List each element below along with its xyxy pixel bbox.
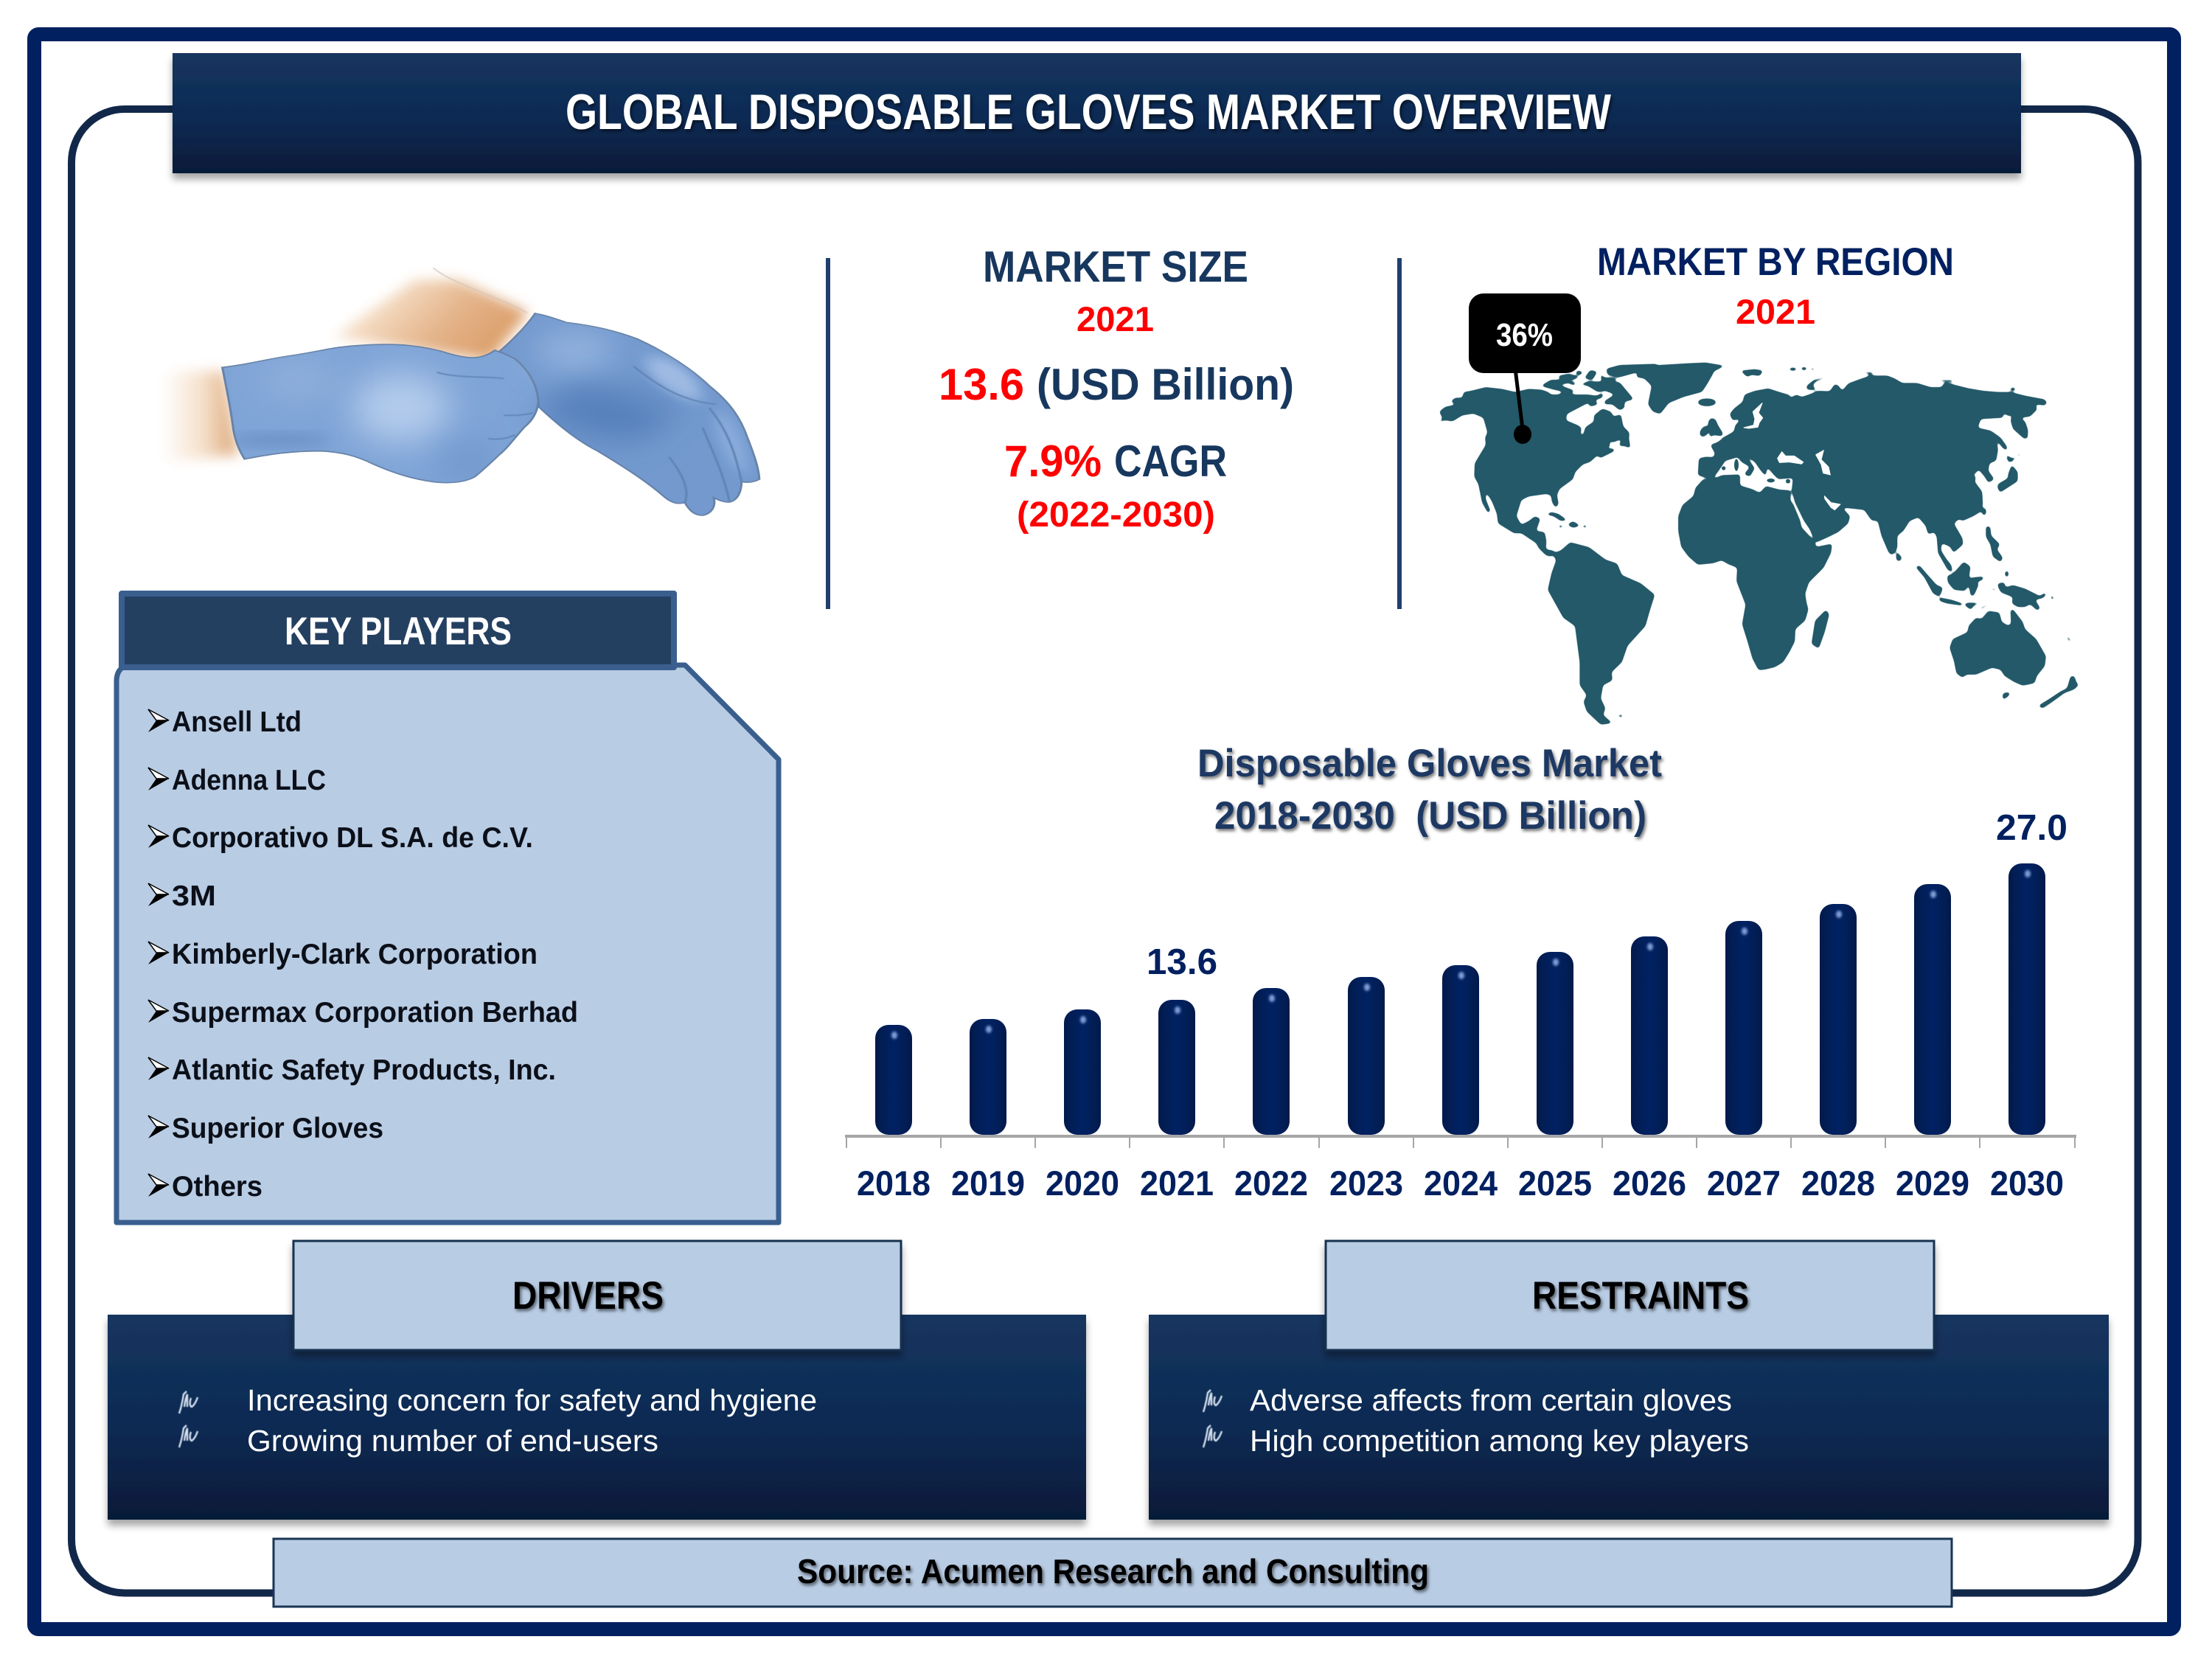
year labels: 2018: [857, 1164, 931, 1203]
year labels: [857, 1164, 2064, 1203]
key players list: 3M: [172, 880, 216, 912]
drivers heading: DRIVERS: [512, 1274, 664, 1318]
market by region heading: MARKET BY REGION: [1597, 240, 1954, 284]
title: GLOBAL DISPOSABLE GLOVES MARKET OVERVIEW: [566, 84, 1612, 140]
year labels: 2022: [1234, 1164, 1308, 1203]
market size heading: MARKET SIZE: [983, 243, 1248, 291]
panel: key players: [116, 594, 779, 1222]
restraints text: Adverse affects from certain gloves: [1250, 1383, 1732, 1417]
market size year: 2021: [1077, 299, 1154, 338]
key players list: Atlantic Safety Products, Inc.: [172, 1054, 556, 1086]
world map: [1435, 363, 2079, 725]
key players heading: KEY PLAYERS: [285, 610, 512, 653]
year labels: 2028: [1801, 1164, 1875, 1203]
icon: bullets: [1203, 1390, 1222, 1447]
year labels: 2019: [951, 1164, 1025, 1203]
key players list: Others: [172, 1171, 262, 1203]
CAGR value: [1004, 437, 1227, 486]
x axis: [845, 1136, 2076, 1148]
value label 2021: 13.6: [1147, 942, 1217, 982]
market size value: (USD Billion): [1037, 360, 1294, 409]
South America: [1548, 542, 1655, 725]
market size value: 13.6: [939, 360, 1024, 409]
key players list: Ansell Ltd: [172, 706, 302, 738]
year labels: 2029: [1896, 1164, 1969, 1203]
year labels: 2023: [1329, 1164, 1403, 1203]
drivers text: Increasing concern for safety and hygiene: [247, 1383, 817, 1417]
chart title: Disposable Gloves Market: [1197, 742, 1662, 785]
CAGR value: CAGR: [1114, 437, 1227, 486]
header banner: [173, 53, 2021, 173]
icon: bullets: [179, 1391, 198, 1447]
key players list: Kimberly-Clark Corporation: [172, 939, 538, 970]
year labels: 2027: [1707, 1164, 1781, 1203]
key players list: [148, 706, 578, 1203]
restraints text: High competition among key players: [1250, 1424, 1749, 1458]
key players list: Supermax Corporation Berhad: [172, 997, 578, 1029]
market by region year: 2021: [1736, 292, 1815, 331]
icon: gloved hands illustration: [162, 268, 759, 515]
value label 2030: 27.0: [1996, 808, 2067, 848]
market size value: [939, 360, 1294, 409]
Mediterranean islands: [1722, 459, 1790, 484]
bar highlights: [891, 870, 2031, 1039]
source text: Source: Acumen Research and Consulting: [797, 1552, 1429, 1590]
year labels: 2021: [1140, 1164, 1214, 1203]
bars: [875, 863, 2045, 1135]
Southeast Asia and Oceania: [1915, 562, 2079, 709]
bar chart: [845, 808, 2076, 1203]
Eurasia, Africa and islands: [1678, 367, 2048, 670]
year labels: 2025: [1518, 1164, 1592, 1203]
key players body: [116, 665, 779, 1222]
drivers tab: [293, 1241, 901, 1350]
North America, Greenland and Caribbean: [1435, 363, 1725, 557]
year labels: 2024: [1424, 1164, 1498, 1203]
key players list: Superior Gloves: [172, 1113, 383, 1144]
key players list: Corporativo DL S.A. de C.V.: [172, 822, 533, 854]
chart title: 2018-2030 (USD Billion): [1214, 794, 1646, 838]
divider line: market by region: [1397, 258, 1402, 609]
chart title: [1197, 742, 1662, 838]
divider line: market size: [826, 258, 830, 609]
key players header box: [122, 594, 674, 667]
year labels: 2030: [1990, 1164, 2064, 1203]
restraints background: [1149, 1315, 2109, 1520]
CAGR period: (2022-2030): [1017, 495, 1215, 535]
CAGR value: 7.9%: [1004, 437, 1102, 486]
drivers background: [108, 1315, 1086, 1520]
restraints tab: [1326, 1241, 1934, 1350]
panel: drivers: [108, 1241, 1086, 1520]
inland seas: [1708, 403, 1840, 510]
restraints heading: RESTRAINTS: [1532, 1274, 1749, 1318]
key players list: Adenna LLC: [172, 765, 326, 796]
year labels: 2026: [1613, 1164, 1686, 1203]
drivers text: Growing number of end-users: [247, 1424, 658, 1458]
panel: restraints: [1149, 1241, 2109, 1520]
restraints text: [1250, 1383, 1749, 1458]
callout: 36 percent North America: 36%: [1496, 317, 1553, 353]
callout: 36 percent North America: [1469, 293, 1581, 444]
source box: [274, 1539, 1952, 1607]
drivers text: [247, 1383, 817, 1458]
year labels: 2020: [1046, 1164, 1119, 1203]
